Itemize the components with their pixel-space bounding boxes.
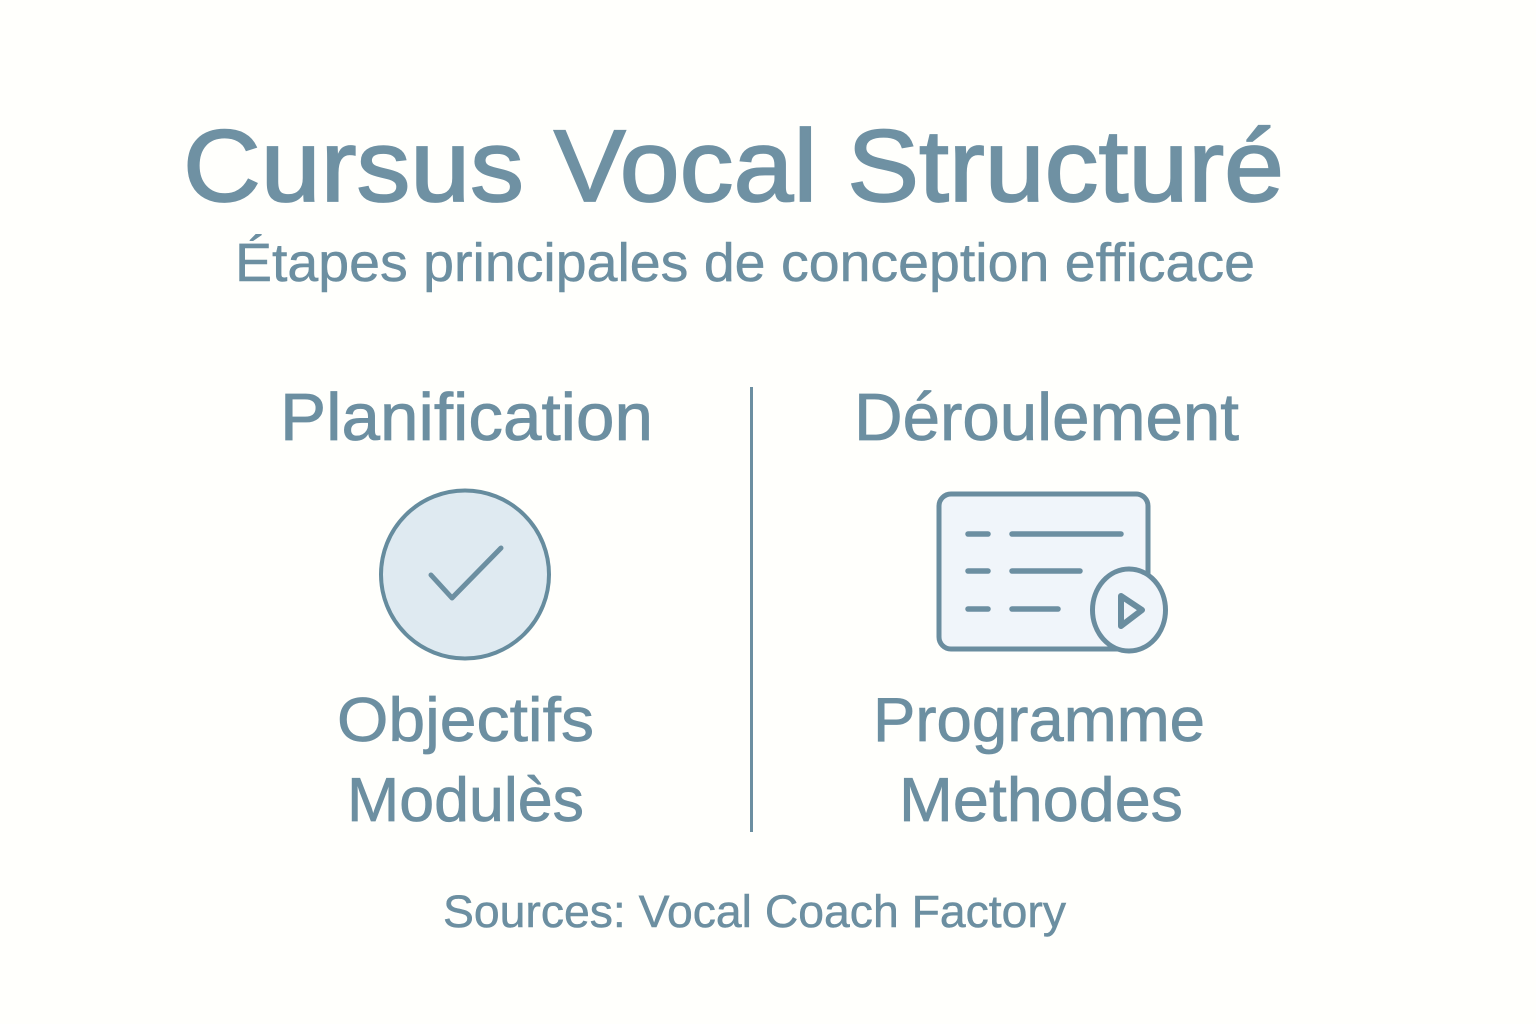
heading: planification: Planification [280, 380, 653, 455]
text: objectifs: Objectifs [337, 686, 594, 755]
divider [750, 387, 753, 832]
text: programme: Programme [873, 686, 1205, 755]
icon: check circle [381, 490, 549, 658]
text: modules: Modulès [347, 766, 584, 835]
sources footer: Sources: Vocal Coach Factory [443, 886, 1067, 937]
heading: deroulement: Déroulement [854, 380, 1239, 455]
panel: planification [280, 380, 653, 835]
text: methodes: Methodes [899, 766, 1183, 835]
panel: deroulement [854, 380, 1239, 835]
subtitle: Étapes principales de conception efficace [235, 233, 1255, 293]
title: Cursus Vocal Structuré [183, 109, 1284, 223]
icon: programme with play button [939, 494, 1166, 651]
